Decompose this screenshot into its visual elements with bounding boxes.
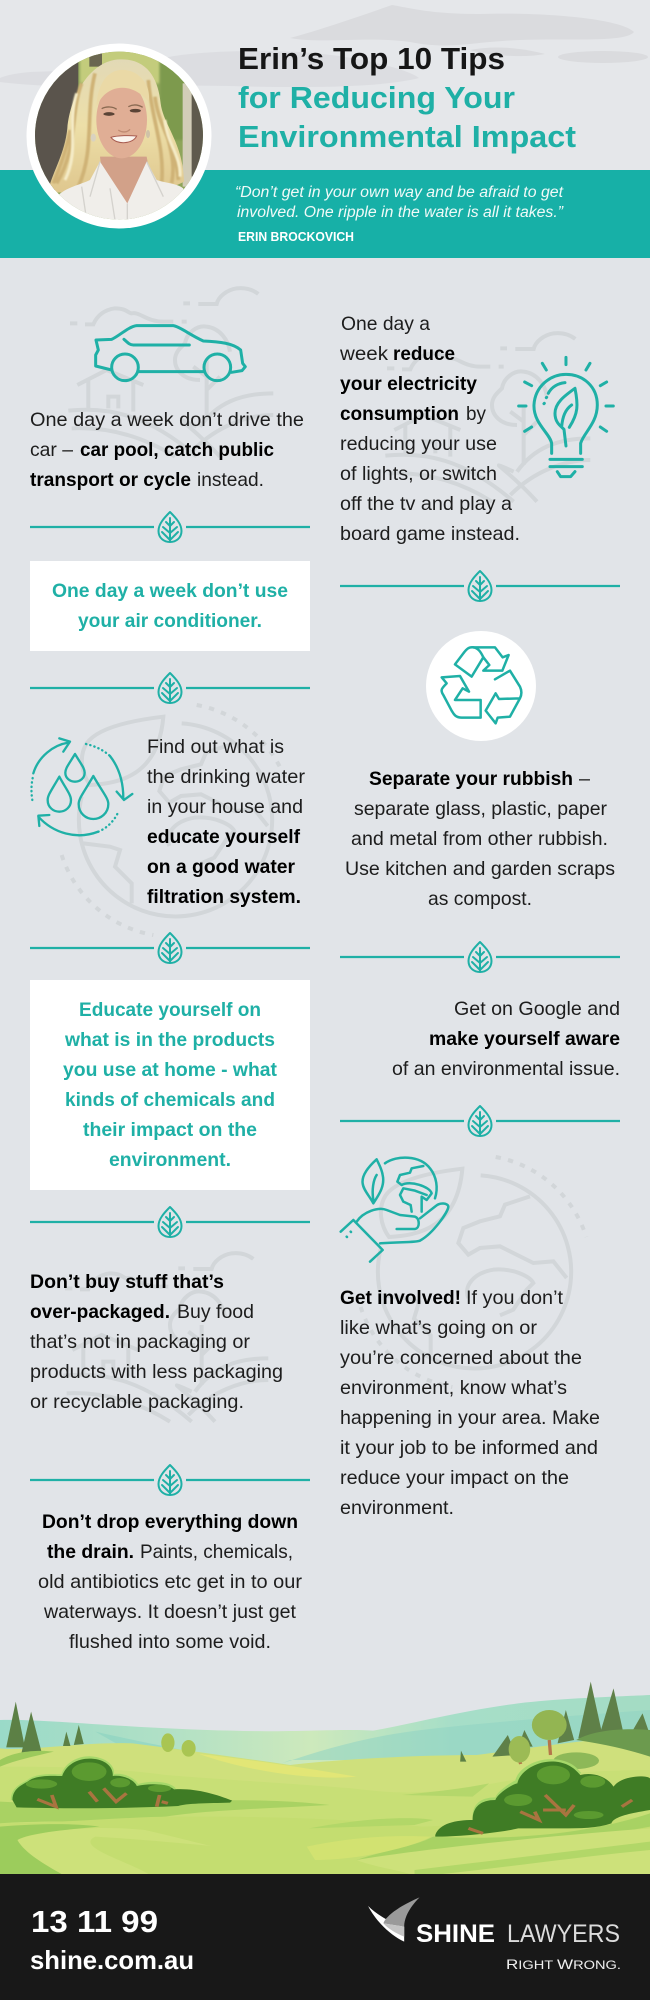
title xyxy=(238,41,576,154)
background illustration: globe behind get involved tip xyxy=(361,1157,586,1387)
logo: Shine Lawyers: LAWYERS xyxy=(507,1920,620,1948)
tip: reduce electricity: your electricity xyxy=(340,373,477,395)
tip: reduce electricity: off the tv and play a xyxy=(340,493,512,515)
tip: separate rubbish xyxy=(345,768,615,910)
icon: car xyxy=(96,326,245,381)
title: Erin’s Top 10 Tips xyxy=(238,41,505,76)
tip: reduce electricity: reducing your use xyxy=(340,433,497,455)
divider xyxy=(340,942,620,972)
background illustration: village behind car xyxy=(68,288,273,457)
tip: down the drain: the drain. xyxy=(47,1541,134,1563)
tip: reduce electricity: consumption xyxy=(340,403,459,425)
divider xyxy=(30,673,310,703)
callout: products at home: you use at home - what xyxy=(63,1059,277,1081)
tip: down the drain: waterways. It doesn’t just get xyxy=(43,1601,297,1623)
callout: products at home: environment. xyxy=(109,1149,231,1171)
phone number: 13 11 99 xyxy=(31,1904,158,1939)
logo: Shine Lawyers xyxy=(368,1897,621,1972)
tip: drinking water: in your house and xyxy=(147,796,303,818)
divider xyxy=(340,571,620,601)
tip: reduce electricity: of lights, or switch xyxy=(340,463,497,485)
tip: down the drain xyxy=(38,1511,303,1653)
tip: get involved: Get involved! xyxy=(340,1287,461,1309)
logo: Shine Lawyers: SHINE xyxy=(416,1920,495,1948)
tip: separate rubbish: Separate your rubbish xyxy=(369,768,573,790)
tip: get on Google: of an environmental issue. xyxy=(392,1058,620,1080)
divider xyxy=(30,1207,310,1237)
title: Environmental Impact xyxy=(238,119,576,154)
callout: products at home xyxy=(30,980,310,1190)
tip: down the drain: flushed into some void. xyxy=(69,1631,271,1653)
tip: over-packaged xyxy=(30,1271,283,1413)
icon: light bulb with leaf xyxy=(519,357,613,477)
icon: hand holding globe and leaf xyxy=(341,1158,448,1262)
tip: over-packaged: Buy food xyxy=(177,1301,254,1323)
tip: separate rubbish: as compost. xyxy=(428,888,532,910)
callout: products at home: their impact on the xyxy=(83,1119,257,1141)
quote: involved. One ripple in the water is all it takes.” xyxy=(237,204,564,221)
background illustration: village behind bulb xyxy=(385,333,590,502)
tip: drinking water: the drinking water xyxy=(147,766,306,788)
tip: down the drain: Don’t drop everything down xyxy=(42,1511,298,1533)
divider xyxy=(30,933,310,963)
tip: over-packaged: products with less packaging xyxy=(30,1361,283,1383)
header teal band xyxy=(0,170,650,258)
tip: drinking water: Find out what is xyxy=(147,736,284,758)
tip: over-packaged: or recyclable packaging. xyxy=(30,1391,244,1413)
website: shine.com.au xyxy=(30,1945,194,1975)
tip: separate rubbish: and metal from other rubbish. xyxy=(351,828,608,850)
tip: get involved: environment, know what’s xyxy=(340,1377,567,1399)
tip: get involved xyxy=(340,1287,600,1519)
quote attribution: ERIN BROCKOVICH xyxy=(238,230,354,244)
quote: “Don’t get in your own way and be afraid to get xyxy=(235,184,564,201)
divider xyxy=(30,1465,310,1495)
header background xyxy=(0,0,650,170)
tip: don't drive xyxy=(30,409,304,491)
callout: products at home: kinds of chemicals and xyxy=(65,1089,275,1111)
divider xyxy=(30,512,310,542)
tip: get involved: happening in your area. Make xyxy=(340,1407,600,1429)
tip: don't drive: instead. xyxy=(197,469,264,491)
tip: reduce electricity: board game instead. xyxy=(340,523,520,545)
tip: get involved: it your job to be informed and xyxy=(340,1437,598,1459)
tip: separate rubbish: Use kitchen and garden scraps xyxy=(345,858,615,880)
quote xyxy=(235,184,564,221)
background illustration: village behind packaging tip xyxy=(63,1253,268,1422)
tip: drinking water: filtration system. xyxy=(147,886,301,908)
tip: get involved: like what’s going on or xyxy=(340,1317,538,1339)
callout: air conditioner: One day a week don’t use xyxy=(52,580,288,602)
tip: get on Google: Get on Google and xyxy=(454,998,620,1020)
background illustration: globe behind water tip xyxy=(62,705,287,935)
portrait of Erin Brockovich xyxy=(26,44,212,230)
tip: over-packaged: Don’t buy stuff that’s xyxy=(30,1271,224,1293)
tip: down the drain: old antibiotics etc get in to our xyxy=(38,1571,303,1593)
callout: air conditioner xyxy=(30,561,310,651)
tip: drinking water xyxy=(147,736,306,908)
tip: over-packaged: that’s not in packaging or xyxy=(30,1331,251,1353)
tip: get involved: environment. xyxy=(340,1497,454,1519)
tip: don't drive: transport or cycle xyxy=(30,469,191,491)
tip: reduce electricity xyxy=(339,313,520,545)
left bush xyxy=(11,1756,182,1800)
tip: drinking water: on a good water xyxy=(147,856,295,878)
tip: reduce electricity: week xyxy=(339,343,388,365)
tip: get on Google: make yourself aware xyxy=(429,1028,620,1050)
trees right xyxy=(492,1682,650,1757)
icon: recycling symbol in white circle xyxy=(426,631,536,741)
tip: get involved: reduce your impact on the xyxy=(340,1467,569,1489)
tip: separate rubbish: – xyxy=(579,768,590,790)
title: for Reducing Your xyxy=(238,80,515,115)
header clouds xyxy=(0,5,648,87)
tip: don't drive: One day a week don’t drive the xyxy=(30,409,304,431)
landscape illustration xyxy=(0,1682,650,1877)
icon: water drops cycle xyxy=(31,738,132,835)
right bush xyxy=(473,1759,581,1823)
trees left xyxy=(6,1702,84,1753)
tip: get on Google xyxy=(392,998,620,1080)
callout: products at home: Educate yourself on xyxy=(79,999,261,1021)
tip: drinking water: educate yourself xyxy=(147,826,300,848)
tip: get involved: you’re concerned about the xyxy=(340,1347,582,1369)
tip: separate rubbish: separate glass, plastic, paper xyxy=(354,798,607,820)
logo: Shine Lawyers: RIGHT WRONG. xyxy=(506,1956,621,1972)
tip: reduce electricity: reduce xyxy=(393,343,455,365)
tip: over-packaged: over-packaged. xyxy=(30,1301,170,1323)
tip: reduce electricity: by xyxy=(466,403,486,425)
tip: get involved: If you don’t xyxy=(466,1287,564,1309)
tip: down the drain: Paints, chemicals, xyxy=(140,1541,293,1563)
footer bar xyxy=(0,1874,650,2000)
tip: don't drive: car – xyxy=(30,439,73,461)
tip: don't drive: car pool, catch public xyxy=(80,439,274,461)
tip: reduce electricity: One day a xyxy=(341,313,430,335)
divider xyxy=(340,1106,620,1136)
callout: air conditioner: your air conditioner. xyxy=(78,610,262,632)
callout: products at home: what is in the products xyxy=(64,1029,275,1051)
